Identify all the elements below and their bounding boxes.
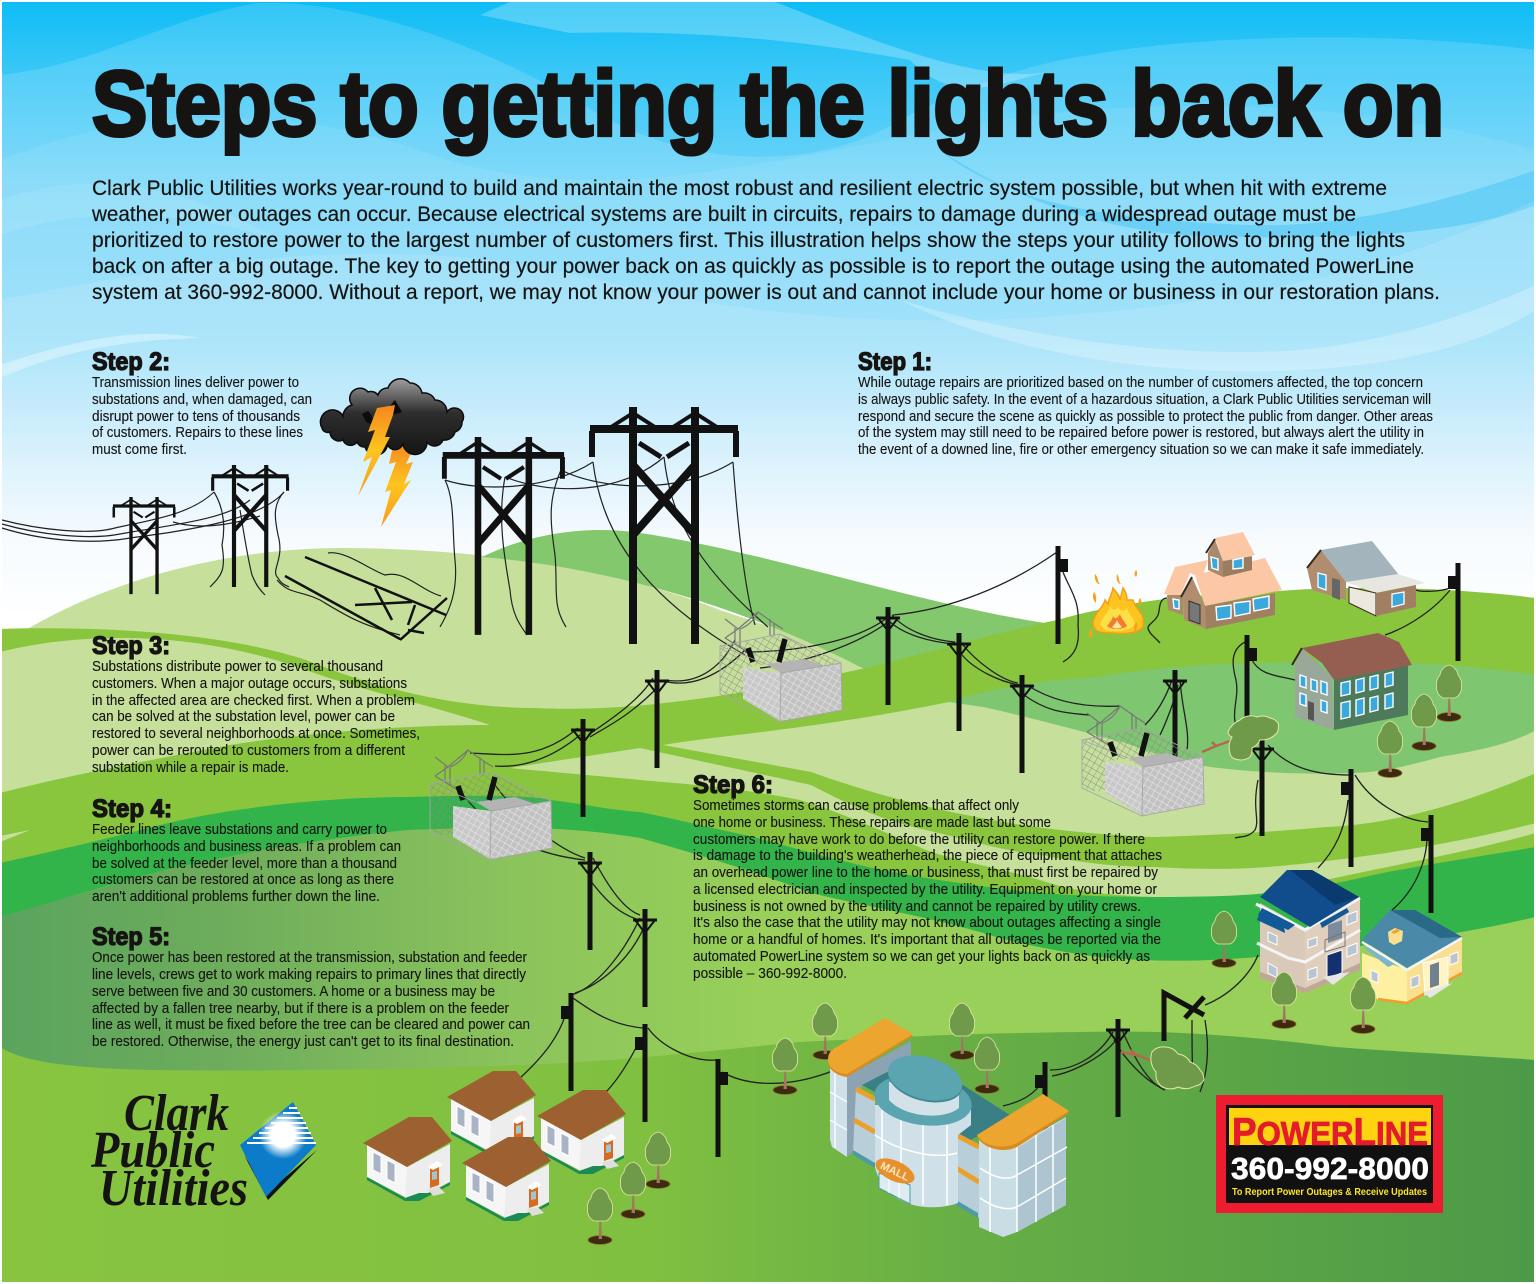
intro paragraph: prioritized to restore power to the largest number of customers first. This illustration helps show the steps your utility follows to bring the lights — [92, 228, 1405, 252]
house: blue roof mansion — [1256, 870, 1360, 993]
PowerLine phone callout: To Report Power Outages & Receive Updates — [1232, 1186, 1427, 1198]
icon: second lightning bolt — [381, 442, 415, 527]
step 6: an overhead power line to the home or business, that must first be repaired by — [693, 864, 1158, 881]
step 4: be solved at the feeder level, more than a thousand — [92, 855, 397, 872]
step 3: restored to several neighborhoods at once. Sometimes, — [92, 725, 420, 742]
PowerLine phone callout: POWERLINE — [1232, 1111, 1428, 1154]
step 1: is always public safety. In the event of a hazardous situation, a Clark Public Utilities serviceman will — [858, 391, 1431, 408]
step 6: It's also the case that the utility may not know about outages affecting a single — [693, 914, 1161, 931]
step 2: of customers. Repairs to these lines — [92, 424, 303, 441]
step 6: possible – 360-992-8000. — [693, 965, 847, 982]
step 4: customers can be restored at once as long as there — [92, 871, 394, 888]
step 5: affected by a fallen tree nearby, but if there is a problem on the feeder — [92, 1000, 509, 1017]
transmission tower 1 — [113, 497, 175, 594]
substation 3 — [430, 750, 552, 860]
step 3 — [92, 632, 420, 776]
logo wordmark: Public — [90, 1122, 215, 1179]
PowerLine phone callout — [1216, 1095, 1443, 1213]
step 6: Step 6: — [693, 771, 773, 799]
step 4 — [92, 795, 401, 905]
houses: white homes cluster — [363, 1071, 626, 1221]
step 1: Step 1: — [858, 348, 932, 376]
step 4: Step 4: — [92, 795, 172, 823]
logo wordmark: Utilities — [99, 1160, 248, 1217]
transmission tower 4 — [590, 407, 738, 644]
step 1: of the system may still need to be repaired before power is restored, but always alert the utility in — [858, 424, 1424, 441]
step 5: Once power has been restored at the transmission, substation and feeder — [92, 949, 527, 966]
logo wordmark — [90, 1085, 248, 1217]
step 5: line levels, crews get to work making repairs to primary lines that directly — [92, 966, 526, 983]
substation 2 — [1082, 706, 1204, 816]
house: grey roof — [1307, 541, 1425, 616]
tree group right — [1377, 665, 1462, 778]
step 5: Step 5: — [92, 923, 170, 951]
house: peach roof — [1164, 532, 1282, 629]
step 6 — [693, 771, 1162, 982]
step 5 — [92, 923, 530, 1050]
step 6: automated PowerLine system so we can get your lights back on as quickly as — [693, 948, 1150, 965]
intro paragraph — [91, 176, 1440, 304]
step 2: disrupt power to tens of thousands — [92, 408, 300, 425]
trees front of houses — [1271, 972, 1376, 1034]
step 2: Step 2: — [92, 348, 170, 376]
step 1 — [858, 348, 1433, 458]
step 6: home or a handful of homes. It's important that all outages be reported via the — [693, 931, 1161, 948]
sky waves — [0, 2, 1536, 620]
sky background — [0, 0, 1536, 620]
step 5: line as well, it must be fixed before the tree can be cleared and power can — [92, 1016, 530, 1033]
icon: fallen tree at line — [1121, 1047, 1204, 1089]
fallen transmission tower — [285, 557, 447, 640]
step 3: customers. When a major outage occurs, substations — [92, 675, 407, 692]
step 4: aren't additional problems further down the line. — [92, 888, 380, 905]
step 1: While outage repairs are prioritized based on the number of customers affected, the top concern — [858, 374, 1423, 391]
step 4: Feeder lines leave substations and carry power to — [92, 821, 387, 838]
transmission tower 2 — [212, 465, 289, 587]
step 1: respond and secure the scene as quickly as possible to protect the public from danger. Other areas — [858, 408, 1433, 425]
wires: distribution lines — [463, 552, 1450, 1106]
PowerLine phone callout: 360-992-8000 — [1231, 1151, 1429, 1186]
intro paragraph: back on after a big outage. The key to getting your power back on as quickly as possible is to report the outage using the automated PowerLine — [92, 254, 1414, 278]
step 6: one home or business. These repairs are made last but some — [693, 814, 1051, 831]
trees centre — [772, 911, 1237, 1094]
step 3: power can be rerouted to customers from a different — [92, 742, 406, 759]
step 2 — [92, 348, 312, 458]
step 3: can be solved at the substation level, power can be — [92, 708, 395, 725]
logo wordmark: Clark — [124, 1085, 229, 1142]
wires: transmission lines — [2, 457, 768, 655]
step 6: is damage to the building's weatherhead, the piece of equipment that attaches — [693, 847, 1162, 864]
icon: lightning bolt — [358, 400, 402, 496]
transmission tower 3 — [443, 437, 564, 635]
house: green three-window — [1292, 633, 1412, 730]
icon: fire — [1089, 570, 1143, 638]
mall building: MALL — [878, 1160, 911, 1184]
step 2: substations and, when damaged, can — [92, 391, 312, 408]
step 3: Substations distribute power to several thousand — [92, 658, 383, 675]
step 3: Step 3: — [92, 632, 170, 660]
Clark Public Utilities logo — [90, 1085, 317, 1217]
step 4: neighborhoods and business areas. If a problem can — [92, 838, 401, 855]
icon: storm cloud — [320, 379, 464, 455]
step 2: must come first. — [92, 441, 187, 458]
logo diamond — [240, 1102, 317, 1200]
step 6: customers may have work to do before the utility can restore power. If there — [693, 831, 1145, 848]
step 3: substation while a repair is made. — [92, 759, 289, 776]
broken pole — [1164, 993, 1204, 1041]
step 5: be restored. Otherwise, the energy just can't get to its final destination. — [92, 1033, 514, 1050]
utility poles — [561, 546, 1460, 1160]
mall building — [828, 1018, 1069, 1237]
intro paragraph: weather, power outages can occur. Because electrical systems are built in circuits, repairs to damage during a widespread outage must be — [91, 202, 1356, 226]
house: yellow with blue roof — [1362, 910, 1462, 1003]
trees near homes — [587, 1132, 671, 1244]
step 5: serve between five and 30 customers. A home or a business may be — [92, 983, 495, 1000]
step 6: business is not owned by the utility and cannot be repaired by utility crews. — [693, 898, 1141, 915]
landscape hills — [0, 530, 1536, 1284]
intro paragraph: system at 360-992-8000. Without a report, we may not know your power is out and cannot include your home or business in our restoration plans. — [92, 280, 1440, 304]
step 6: Sometimes storms can cause problems that affect only — [693, 797, 1019, 814]
step 6: a licensed electrician and inspected by the utility. Equipment on your home or — [693, 881, 1157, 898]
step 1: the event of a downed line, fire or other emergency situation so we can make it safe immediately. — [858, 441, 1424, 458]
step 2: Transmission lines deliver power to — [92, 374, 299, 391]
step 3: in the affected area are checked first. When a problem — [92, 692, 415, 709]
icon: fallen tree at pole — [1202, 716, 1278, 760]
substation 1 — [720, 612, 842, 722]
intro paragraph: Clark Public Utilities works year-round to build and maintain the most robust and resilient electric system possible, but when hit with extreme — [92, 176, 1387, 200]
